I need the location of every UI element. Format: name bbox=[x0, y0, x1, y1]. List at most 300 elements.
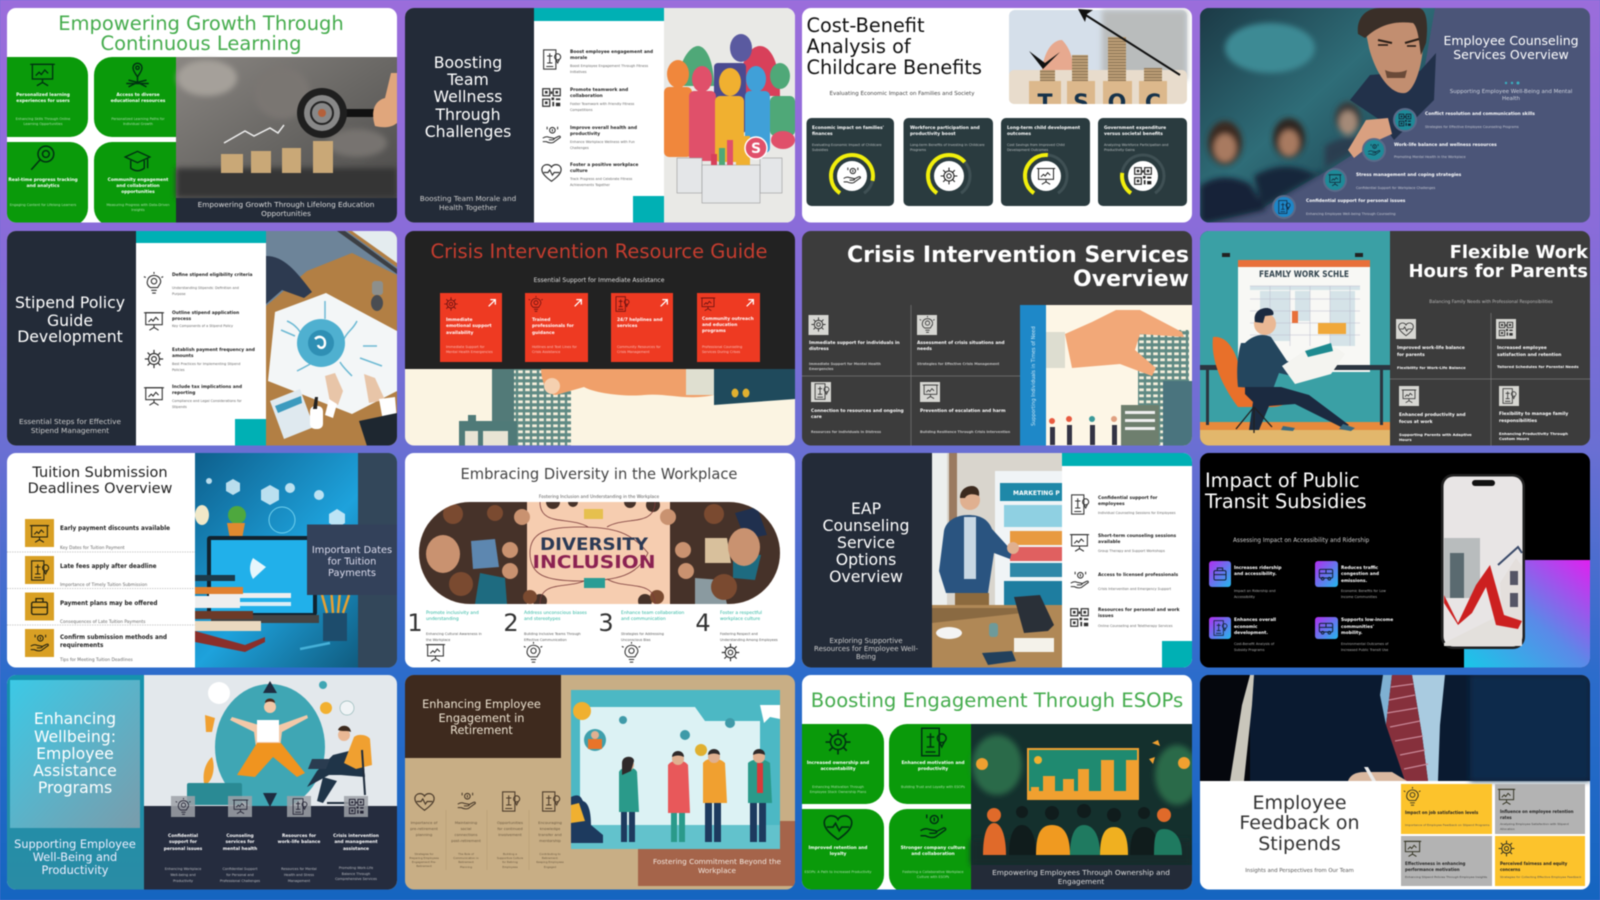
card text: Insights bbox=[131, 208, 145, 212]
numbered steps: and communication bbox=[621, 616, 666, 622]
left title panel: Well-Being and bbox=[33, 851, 117, 864]
teal accents bbox=[534, 8, 664, 223]
left title panel: Stipend Management bbox=[31, 426, 109, 435]
numbered steps: and stereotypes bbox=[524, 616, 561, 622]
card icons bbox=[30, 63, 150, 171]
metric items: development. bbox=[1234, 630, 1268, 636]
engagement items: Engaged bbox=[544, 865, 556, 869]
engagement items: Keeping Employees bbox=[536, 860, 564, 864]
benefit items: Hours bbox=[1399, 437, 1412, 442]
photo: diversity and inclusion circle bbox=[419, 495, 780, 608]
left title panel bbox=[405, 8, 534, 223]
left title panel: Boosting Team Morale and bbox=[420, 194, 516, 203]
gauge cards: Cost Savings from Improved Child bbox=[1007, 143, 1065, 147]
panel: Crisis Intervention Resource Guide bbox=[405, 231, 795, 446]
green feature cards bbox=[6, 56, 177, 224]
gauge cards: Development Outcomes bbox=[1007, 148, 1048, 152]
engagement items: Engagement Pre- bbox=[412, 860, 436, 864]
list items: Access to licensed professionals bbox=[1098, 572, 1179, 578]
title: Empowering Growth Through bbox=[58, 12, 344, 35]
lower navy band: Resources for bbox=[282, 833, 317, 839]
list items: Best Practices for Implementing Stipend bbox=[172, 362, 240, 366]
benefit items: Increased employee bbox=[1497, 345, 1547, 351]
metric items: and accessibility. bbox=[1234, 571, 1277, 577]
engagement items: Communication in bbox=[453, 856, 479, 860]
engagement items: social bbox=[461, 826, 471, 831]
metric items: congestion and bbox=[1341, 571, 1379, 577]
engagement items: Maintaining bbox=[455, 820, 478, 825]
divider dots bbox=[1505, 82, 1520, 84]
illustration: man with schedule bbox=[1200, 231, 1390, 446]
engagement items bbox=[409, 792, 564, 870]
list items: collaboration bbox=[570, 93, 603, 99]
numbered steps: Fostering Respect and bbox=[720, 632, 758, 636]
list items: Track Progress and Celebrate Fitness bbox=[569, 177, 633, 181]
service items: Building Resilience Through Crisis Intervention bbox=[920, 430, 1011, 434]
benefit items: Improved work-life balance bbox=[1397, 345, 1465, 351]
list items: process bbox=[172, 316, 192, 322]
gauge cards: Productivity Gains bbox=[1104, 148, 1135, 152]
list items: Short-term counseling sessions bbox=[1098, 533, 1176, 539]
metric items: Economic Benefits for Low bbox=[1341, 589, 1386, 593]
title box bbox=[405, 675, 561, 758]
left title panel: Boosting bbox=[434, 53, 502, 72]
lower navy band: Resources for Mental bbox=[281, 867, 317, 871]
engagement items: Importance of bbox=[411, 820, 438, 825]
list items: Boost Employee Engagement Through Fitness bbox=[570, 64, 648, 68]
deadline items: Key Dates for Tuition Payment bbox=[60, 545, 125, 551]
deadline items: Confirm submission methods and bbox=[60, 635, 167, 641]
card text: Increased ownership and bbox=[807, 760, 869, 766]
title: Cost-Benefit bbox=[806, 14, 925, 37]
caption bar: Empowering Growth Through Lifelong Education bbox=[198, 200, 374, 209]
card text: Access to diverse bbox=[116, 92, 160, 98]
feedback cards: concerns bbox=[1500, 867, 1521, 872]
list items: Stipends bbox=[172, 405, 187, 409]
list items: Crisis Intervention and Emergency Support bbox=[1098, 587, 1172, 591]
engagement items: knowledge bbox=[540, 826, 561, 831]
photo: coin stacks on wooden blocks: T bbox=[1037, 91, 1053, 116]
red cards: Community outreach bbox=[702, 316, 754, 322]
list items: reporting bbox=[172, 390, 195, 396]
metric items bbox=[1209, 561, 1393, 652]
photo: team with man pointing bbox=[1200, 8, 1436, 223]
title: Feedback on bbox=[1239, 812, 1360, 834]
illustration: hand placing building bbox=[405, 369, 795, 446]
benefit items: Custom Hours bbox=[1499, 436, 1530, 441]
card text: Fostering a Collaborative Workplace bbox=[902, 870, 964, 874]
red cards: emotional support bbox=[446, 323, 492, 329]
card text: Community engagement bbox=[108, 177, 168, 183]
illustration: team collaboration bbox=[571, 690, 780, 849]
card text: Measuring Progress with Data-Driven bbox=[106, 203, 170, 207]
gauge cards: Long-term Benefits of Investing in Childcare bbox=[910, 143, 985, 147]
illustration: colourful team: S bbox=[751, 141, 761, 157]
list items: Foster Teamwork with Friendly Fitness bbox=[570, 102, 634, 106]
red cards: and education bbox=[702, 322, 737, 328]
list items: available bbox=[1098, 539, 1120, 545]
card text: Learning Opportunities bbox=[24, 122, 63, 126]
gradient block bbox=[1464, 560, 1590, 668]
lower navy band: Comprehensive Services bbox=[335, 877, 377, 881]
red cards: guidance bbox=[532, 330, 555, 336]
benefit items bbox=[1396, 319, 1579, 442]
list items: Compliance and Legal Considerations for bbox=[172, 399, 242, 403]
feedback cards: Impact on job satisfaction levels bbox=[1405, 810, 1479, 815]
engagement items: Planning bbox=[460, 865, 472, 869]
metric items: Impact on Ridership and bbox=[1234, 589, 1276, 593]
card text: loyalty bbox=[830, 851, 847, 857]
left title panel: Challenges bbox=[425, 122, 511, 141]
feedback cards: Perceived fairness and equity bbox=[1500, 861, 1568, 866]
timeline items: Work-life balance and wellness resources bbox=[1394, 142, 1497, 148]
metric items: Enhances overall bbox=[1234, 617, 1277, 623]
left title panel: Wellness bbox=[434, 87, 502, 106]
engagement items: Retirement bbox=[458, 860, 475, 864]
metric items: emissions. bbox=[1341, 578, 1368, 584]
engagement items: transfer and bbox=[538, 832, 562, 837]
grid dividers bbox=[802, 305, 1020, 446]
red cards: Immediate bbox=[446, 317, 472, 323]
lower navy band: Promoting Work-Life bbox=[339, 866, 373, 870]
deadline items bbox=[7, 519, 195, 663]
list items: Policies bbox=[172, 368, 185, 372]
metric items: Increases ridership bbox=[1234, 565, 1282, 571]
left title panel: Overview bbox=[829, 567, 903, 586]
card text: Real-time progress tracking bbox=[8, 177, 78, 183]
title: Boosting Engagement Through ESOPs bbox=[811, 689, 1183, 712]
lower navy band: mental health bbox=[223, 846, 257, 852]
numbered steps: 2 bbox=[503, 609, 519, 637]
left title panel bbox=[7, 231, 136, 446]
card text: Personalized learning bbox=[16, 92, 70, 98]
numbered steps: workplace culture bbox=[720, 616, 760, 622]
list items: Enhance Workplace Wellness with Fun bbox=[570, 140, 635, 144]
feedback cards bbox=[1401, 784, 1585, 886]
panel: Boosting Team Wellness Through Challenges bbox=[405, 8, 795, 223]
list items: Establish payment frequency and bbox=[172, 347, 255, 353]
gauge cards: Long-term child development bbox=[1007, 125, 1080, 131]
illustration: hand placing building bbox=[1045, 304, 1193, 446]
title: Hours for Parents bbox=[1408, 261, 1588, 282]
title: Embracing Diversity in the Workplace bbox=[461, 466, 737, 483]
gauge cards: Subsidies bbox=[812, 148, 828, 152]
title: Continuous Learning bbox=[100, 32, 302, 55]
list items: Confidential support for bbox=[1098, 495, 1158, 501]
engagement items: Encouraging bbox=[538, 820, 562, 825]
metric items: Subsidy Programs bbox=[1234, 648, 1265, 652]
left title panel bbox=[802, 453, 932, 668]
list items: amounts bbox=[172, 353, 194, 359]
illustration: colourful team bbox=[664, 8, 795, 223]
illustration: laptop and books bbox=[195, 453, 397, 668]
list items: employees bbox=[1098, 501, 1125, 507]
numbered steps: 3 bbox=[598, 609, 614, 637]
list items: Competitions bbox=[570, 108, 593, 112]
panel: Flexible Work Hours for Parents bbox=[1200, 231, 1590, 446]
service items: Emergencies bbox=[809, 367, 833, 371]
timeline items: Strategies for Effective Employee Counseling Programs bbox=[1425, 125, 1519, 129]
left title panel: Supporting Employee bbox=[14, 838, 136, 851]
card text: educational resources bbox=[111, 98, 166, 104]
service items: Prevention of escalation and harm bbox=[920, 408, 1006, 414]
photo: coin stacks on wooden blocks: O bbox=[1108, 91, 1126, 116]
title: Transit Subsidies bbox=[1204, 490, 1367, 513]
list items bbox=[144, 272, 255, 409]
left title panel: Team bbox=[446, 70, 489, 89]
red cards: availability bbox=[446, 330, 474, 336]
panel: Employee Counseling Services Overview bbox=[1200, 8, 1590, 223]
list items: Purpose bbox=[172, 292, 186, 296]
callout: important dates: Important Dates bbox=[312, 545, 392, 556]
title: Deadlines Overview bbox=[28, 481, 173, 497]
engagement items: Retirement bbox=[416, 864, 433, 868]
card text: ESOPs: A Path to Increased Productivity bbox=[804, 870, 872, 874]
card text: Culture with ESOPs bbox=[917, 875, 949, 879]
card text: Enhancing Motivation Through bbox=[812, 785, 864, 789]
list items: Online Counseling and Teletherapy Services bbox=[1098, 624, 1173, 628]
caption bar bbox=[971, 865, 1192, 890]
metric items: Reduces traffic bbox=[1341, 565, 1378, 571]
engagement items: Building a bbox=[503, 852, 517, 856]
service items: Resources for Individuals in Distress bbox=[811, 430, 881, 434]
left title panel: Employee bbox=[36, 744, 114, 763]
list items: issues bbox=[1098, 613, 1114, 619]
green feature cards bbox=[782, 724, 989, 893]
card text: Stronger company culture bbox=[901, 845, 965, 851]
numbered steps: Enhancing Cultural Awareness in bbox=[426, 632, 482, 636]
numbered steps: Foster a respectful bbox=[720, 610, 762, 616]
subtitle: Balancing Family Needs with Professional Responsibilities bbox=[1429, 299, 1553, 305]
numbered steps: 1 bbox=[407, 609, 423, 637]
numbered steps: Understanding Among Employees bbox=[720, 638, 778, 642]
feedback cards: Effectiveness in enhancing bbox=[1405, 861, 1466, 866]
benefit items: for parents bbox=[1397, 352, 1425, 358]
lower navy band: and management bbox=[334, 839, 378, 845]
list items: Promote teamwork and bbox=[570, 87, 628, 93]
title: Childcare Benefits bbox=[806, 56, 982, 79]
numbered steps: Promote inclusivity and bbox=[426, 610, 479, 616]
left title panel bbox=[7, 675, 144, 890]
list items: Boost employee engagement and bbox=[570, 49, 653, 55]
numbered steps: 4 bbox=[695, 609, 711, 637]
list items: Improve overall health and bbox=[570, 125, 637, 131]
benefit items: Enhanced productivity and bbox=[1399, 412, 1465, 418]
red cards: Community Resources for bbox=[617, 345, 661, 349]
red cards: Hotlines and Text Lines for bbox=[532, 345, 577, 349]
engagement items: Opportunities bbox=[497, 820, 523, 825]
service items: needs bbox=[917, 346, 932, 352]
red cards: professionals for bbox=[532, 323, 575, 329]
card text: accountability bbox=[820, 766, 856, 772]
metric items: Supports low-income bbox=[1341, 617, 1393, 623]
engagement items: for Retiring bbox=[502, 860, 518, 864]
card text: experiences for users bbox=[16, 98, 70, 104]
callout: important dates bbox=[307, 524, 397, 595]
list items: Initiatives bbox=[570, 70, 587, 74]
teal accents bbox=[1062, 453, 1192, 668]
caption box bbox=[638, 821, 795, 886]
red cards bbox=[440, 293, 760, 362]
gauge cards: Workforce participation and bbox=[910, 125, 980, 131]
illustration: man with schedule: FEAMLY WORK SCHLE bbox=[1259, 270, 1349, 280]
panel: Embracing Diversity in the Workplace bbox=[405, 453, 795, 668]
callout: important dates: for Tuition bbox=[328, 556, 376, 568]
subtitle: Essential Support for Immediate Assistance bbox=[534, 277, 665, 284]
photo: diversity and inclusion circle: DIVERSITY bbox=[540, 535, 649, 555]
lower navy band: Confidential bbox=[168, 833, 198, 839]
left title panel: Enhancing bbox=[34, 709, 116, 728]
engagement items: for continued bbox=[497, 826, 523, 831]
deadline items: requirements bbox=[60, 643, 104, 649]
photo: planning at a wooden table bbox=[266, 231, 402, 446]
timeline items: Enhancing Employee Well-being Through Counseling bbox=[1306, 212, 1396, 216]
lower navy band: Confidential Support bbox=[223, 867, 258, 871]
gauge cards: Analyzing Workforce Participation and bbox=[1104, 143, 1168, 147]
numbered steps: Address unconscious biases bbox=[524, 610, 588, 616]
left title panel: Options bbox=[836, 550, 896, 569]
engagement items: involvement bbox=[498, 832, 522, 837]
title: Crisis Intervention Services bbox=[847, 243, 1189, 268]
lower navy band: Crisis intervention bbox=[333, 833, 379, 839]
panel: Cost-Benefit Analysis of Childcare Benefits bbox=[802, 8, 1192, 223]
lower navy band: support for bbox=[169, 839, 198, 845]
card text: and collaboration bbox=[116, 183, 160, 189]
list items: Individual Counseling Sessions for Employees bbox=[1098, 511, 1176, 515]
title: Crisis Intervention Resource Guide bbox=[430, 240, 768, 263]
engagement items: Preparing Employees bbox=[409, 856, 439, 860]
caption bar: Engagement bbox=[1058, 877, 1104, 886]
panel: Enhancing Wellbeing: Employee Assistance Programs bbox=[7, 675, 397, 890]
metric items: mobility. bbox=[1341, 630, 1363, 636]
lower navy band: Productivity bbox=[173, 879, 193, 883]
lower navy band: Professional Challenges bbox=[220, 879, 260, 883]
engagement items: connections bbox=[455, 832, 477, 837]
card text: Individual Growth bbox=[123, 122, 153, 126]
benefit items: Supporting Parents with Adaptive bbox=[1399, 432, 1472, 437]
red cards: Crisis Management bbox=[617, 350, 650, 354]
panel: Stipend Policy Guide Development bbox=[7, 231, 402, 446]
service items bbox=[808, 315, 1011, 434]
illustration: balancing wellbeing bbox=[187, 681, 372, 810]
title: Overview bbox=[1073, 267, 1189, 292]
gauge cards bbox=[806, 118, 1187, 206]
card text: Building Trust and Loyalty with ESOPs bbox=[901, 785, 965, 789]
red cards: Professional Counseling bbox=[702, 345, 742, 349]
left title panel: Being bbox=[856, 653, 876, 661]
list items: Include tax implications and bbox=[172, 384, 242, 390]
list items: Group Therapy and Support Workshops bbox=[1098, 549, 1165, 553]
list items: morale bbox=[570, 55, 587, 61]
subtitle: Evaluating Economic Impact on Families and Society bbox=[830, 91, 975, 97]
lower navy band: Health and Stress bbox=[284, 873, 314, 877]
gauge cards: versus societal benefits bbox=[1104, 131, 1163, 137]
title box: Retirement bbox=[450, 724, 513, 737]
engagement items: planning bbox=[416, 832, 433, 837]
service items: Strategies for Effective Crisis Management bbox=[917, 362, 1000, 366]
metric items: communities' bbox=[1341, 624, 1374, 630]
panel: Impact of Public Transit Subsidies bbox=[1200, 453, 1590, 668]
card text: productivity bbox=[918, 766, 948, 772]
gauge cards: Programs bbox=[910, 148, 926, 152]
lower navy band: Management bbox=[288, 879, 311, 883]
metric items: Accessibility bbox=[1234, 595, 1255, 599]
numbered steps: Unconscious Bias bbox=[621, 638, 651, 642]
metric items: Environmental Outcomes of bbox=[1341, 642, 1389, 646]
card text: Employee Stock Ownership Plans bbox=[810, 790, 866, 794]
benefit items: Flexibility for Work-Life Balance bbox=[1397, 365, 1466, 370]
title: Stipends bbox=[1258, 833, 1341, 855]
left title panel: EAP bbox=[851, 499, 881, 518]
card icons bbox=[824, 728, 946, 840]
list items: Understanding Stipends: Definition and bbox=[172, 286, 239, 290]
panel: Enhancing Employee Engagement in Retirement bbox=[405, 675, 795, 890]
engagement items: post-retirement bbox=[451, 838, 481, 843]
lower navy band: Well-being and bbox=[170, 873, 196, 877]
red cards: programs bbox=[702, 328, 726, 334]
subtitle: Assessing Impact on Accessibility and Ridership bbox=[1233, 538, 1370, 544]
engagement items: pre-retirement bbox=[410, 826, 438, 831]
list items: Key Components of a Stipend Policy bbox=[172, 324, 233, 328]
feedback cards: Strategies for Collecting Effective Employee Feedback bbox=[1500, 875, 1582, 879]
title: Services Overview bbox=[1453, 47, 1569, 62]
benefit items: responsibilities bbox=[1499, 418, 1537, 424]
lower navy band: personal issues bbox=[164, 846, 203, 852]
deadline items: Consequences of Late Tuition Payments bbox=[60, 619, 146, 625]
benefit items: Enhancing Productivity Through bbox=[1499, 431, 1568, 436]
numbered steps: Effective Communication bbox=[524, 638, 567, 642]
title: Employee Counseling bbox=[1443, 33, 1579, 48]
gauge cards: finances bbox=[812, 131, 833, 137]
subtitle: Health bbox=[1502, 96, 1521, 102]
lower navy band: services for bbox=[226, 839, 255, 845]
numbered steps bbox=[407, 609, 778, 662]
grid dividers bbox=[1390, 313, 1590, 446]
panel: Tuition Submission Deadlines Overview bbox=[7, 453, 397, 668]
numbered steps: understanding bbox=[426, 616, 459, 622]
service items: distress bbox=[809, 346, 829, 352]
metric items: Cost-Benefit Analysis of bbox=[1234, 642, 1275, 646]
metric items: Income Communities bbox=[1341, 595, 1377, 599]
card text: Personalized Learning Paths for bbox=[111, 117, 165, 121]
panel: EAP Counseling Service Options Overview bbox=[802, 453, 1192, 668]
card text: Engaging Content for Lifelong Learners bbox=[10, 203, 76, 207]
numbered steps: Strategies for Addressing bbox=[621, 632, 664, 636]
list items: Achievements Together bbox=[570, 183, 610, 187]
phone mockup bbox=[1441, 474, 1525, 649]
lower navy band: Enhancing Workplace bbox=[165, 867, 201, 871]
left title panel: Programs bbox=[38, 778, 112, 797]
lower navy band bbox=[144, 796, 397, 890]
list items bbox=[542, 49, 653, 187]
card text: opportunities bbox=[121, 189, 155, 195]
photo: coin stacks on wooden blocks: S bbox=[1073, 91, 1089, 116]
left title panel: Through bbox=[434, 105, 501, 124]
photo: coin stacks on wooden blocks: C bbox=[1145, 91, 1161, 116]
timeline items: Confidential Support for Workplace Challenges bbox=[1356, 186, 1435, 190]
red cards: Trained bbox=[532, 317, 550, 323]
deadline items: Payment plans may be offered bbox=[60, 601, 157, 607]
gauge cards: Evaluating Economic Impact of Childcare bbox=[812, 143, 882, 147]
engagement items: mentorship bbox=[539, 838, 561, 843]
numbered steps: Enhance team collaboration bbox=[621, 610, 684, 616]
teal accents bbox=[136, 231, 266, 446]
engagement items: The Role of bbox=[457, 852, 475, 856]
photo: diversity and inclusion circle: INCLUSION bbox=[532, 552, 656, 573]
photo: wooden blocks and magnifier bbox=[176, 57, 397, 198]
metric items: economic bbox=[1234, 624, 1258, 630]
timeline items: Confidential support for personal issues bbox=[1306, 198, 1406, 204]
